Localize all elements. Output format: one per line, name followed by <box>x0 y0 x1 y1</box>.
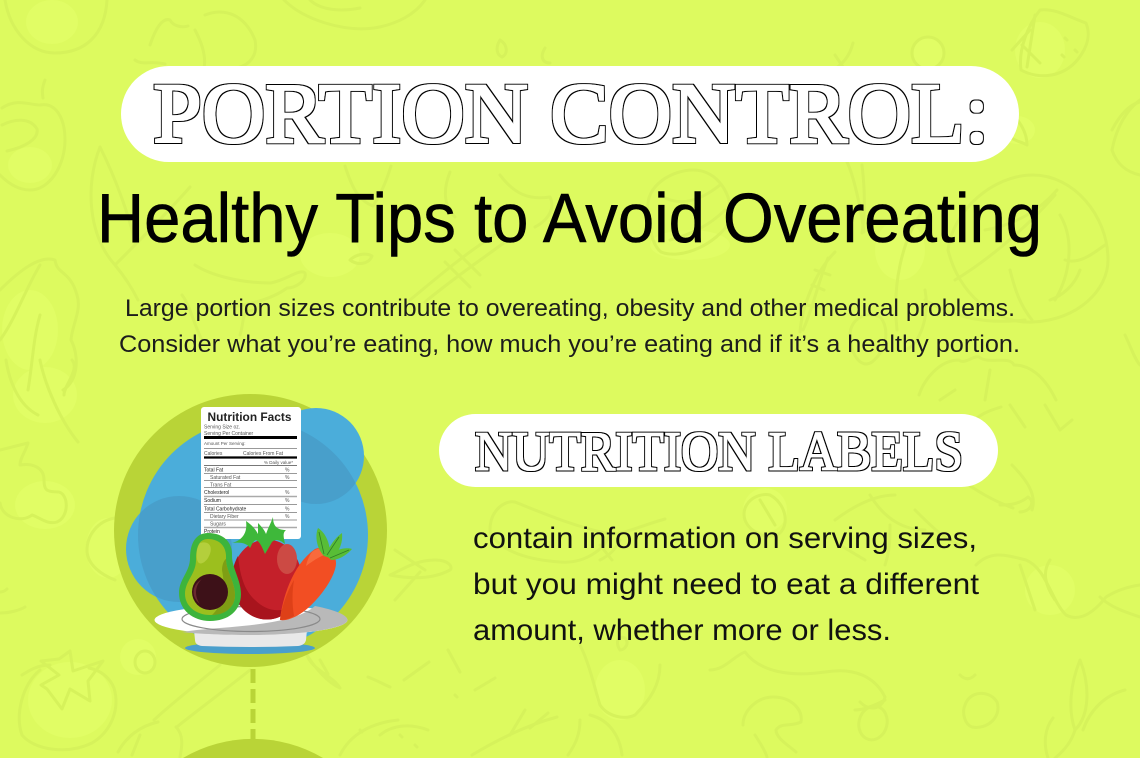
nutrition facts card <box>201 407 301 539</box>
green backdrop circle <box>114 394 387 667</box>
nutrition facts card: Saturated Fat <box>210 475 241 481</box>
blue backdrop <box>126 408 368 650</box>
section body text: but you might need to eat a different <box>473 568 980 601</box>
avocado <box>179 533 241 621</box>
nutrition facts card: Trans Fat <box>210 482 232 488</box>
nutrition facts card: Total Carbohydrate <box>204 506 246 512</box>
nutrition facts card: % <box>285 468 290 474</box>
connector: dashed line <box>250 669 256 740</box>
next section circle <box>183 739 323 758</box>
section banner: Nutrition Labels <box>439 414 998 487</box>
tomato <box>232 517 302 620</box>
intro paragraph: Large portion sizes contribute to overeating, obesity and other medical problems. <box>125 295 1015 322</box>
nutrition facts card: % <box>285 498 290 504</box>
section body text: amount, whether more or less. <box>473 614 891 647</box>
nutrition facts card: % <box>285 506 290 512</box>
section heading text: NUTRITION LABELS <box>475 421 963 483</box>
nutrition facts card: Amount Per Serving: <box>204 441 246 446</box>
nutrition facts card: % <box>285 475 290 481</box>
section body text: contain information on serving sizes, <box>473 522 977 555</box>
nutrition facts card: Nutrition Facts <box>208 410 292 424</box>
nutrition facts card: Sugars <box>210 522 226 528</box>
nutrition facts card: Calories <box>204 451 223 457</box>
nutrition facts card: Dietary Fiber <box>210 514 239 520</box>
carrot <box>280 528 352 620</box>
nutrition facts card: % Daily value* <box>264 460 293 465</box>
plate <box>154 605 348 654</box>
title banner: Portion Control <box>121 65 1019 162</box>
nutrition facts card: % <box>285 490 290 496</box>
nutrition facts card: Serving Size oz. <box>204 424 240 430</box>
title text: PORTION CONTROL: <box>153 65 989 161</box>
nutrition facts card: Serving Per Container <box>204 431 254 437</box>
nutrition facts card: Sodium <box>204 498 221 504</box>
illustration: nutrition label and vegetables on a plate <box>114 394 387 667</box>
intro paragraph: Consider what you’re eating, how much you’re eating and if it’s a healthy portion. <box>119 331 1020 358</box>
section body text <box>473 522 980 647</box>
nutrition facts card: % <box>285 514 290 520</box>
subtitle heading: Healthy Tips to Avoid Overeating <box>97 179 1042 257</box>
intro paragraph <box>119 295 1020 358</box>
nutrition facts card: Calories From Fat <box>243 451 284 457</box>
nutrition facts card: Protein <box>204 529 220 535</box>
nutrition facts card: Total Fat <box>204 468 224 474</box>
nutrition facts card: Cholesterol <box>204 490 229 496</box>
